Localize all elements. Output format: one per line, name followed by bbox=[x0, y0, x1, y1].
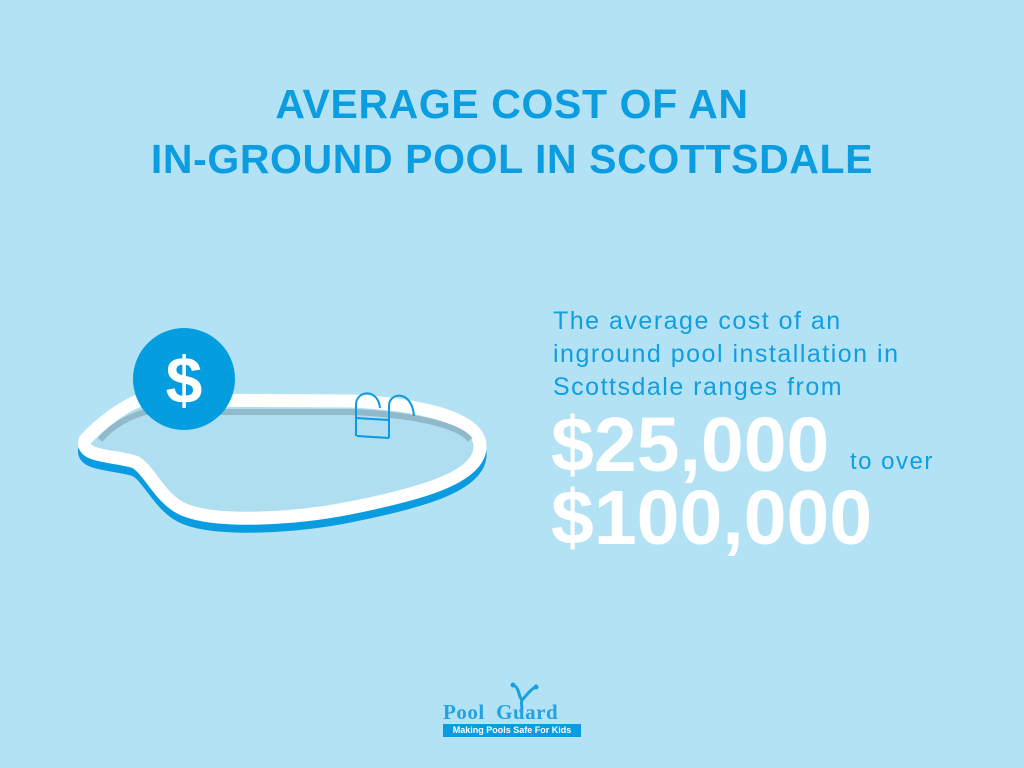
logo: Pool Guard bbox=[443, 700, 558, 724]
title: IN-GROUND POOL IN SCOTTSDALE bbox=[151, 136, 873, 182]
logo bbox=[443, 682, 581, 737]
text: description: inground pool installation in bbox=[553, 340, 900, 368]
text: description: Scottsdale ranges from bbox=[553, 373, 843, 401]
illustration: pool with dollar icon bbox=[78, 328, 487, 533]
title: AVERAGE COST OF AN bbox=[275, 81, 749, 127]
title bbox=[151, 81, 873, 182]
text: description bbox=[553, 307, 900, 401]
stat: $100,000: $100,000 bbox=[551, 475, 872, 561]
icon: ladder bbox=[356, 393, 414, 438]
text: description: The average cost of an bbox=[553, 307, 842, 335]
icon: dollar circle bbox=[133, 328, 235, 430]
text: to over: to over bbox=[850, 448, 934, 475]
icon: dollar circle: $ bbox=[166, 343, 202, 417]
logo: Making Pools Safe For Kids bbox=[453, 725, 571, 735]
stat: $25,000: $25,000 bbox=[551, 402, 829, 488]
